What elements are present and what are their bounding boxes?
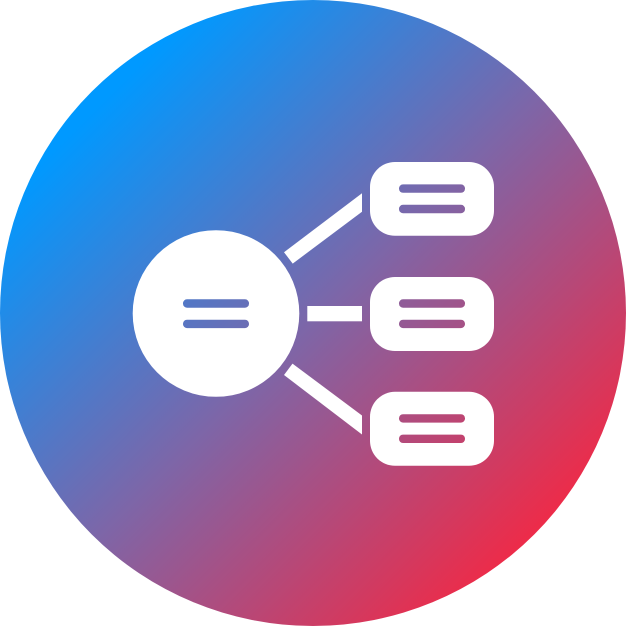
central node: [133, 230, 299, 397]
top node: [370, 162, 494, 236]
connector: bottom: [284, 364, 362, 434]
bottom node: [370, 392, 494, 466]
connector: middle: [307, 306, 362, 321]
connector: top: [284, 193, 362, 264]
middle node: [370, 277, 494, 351]
